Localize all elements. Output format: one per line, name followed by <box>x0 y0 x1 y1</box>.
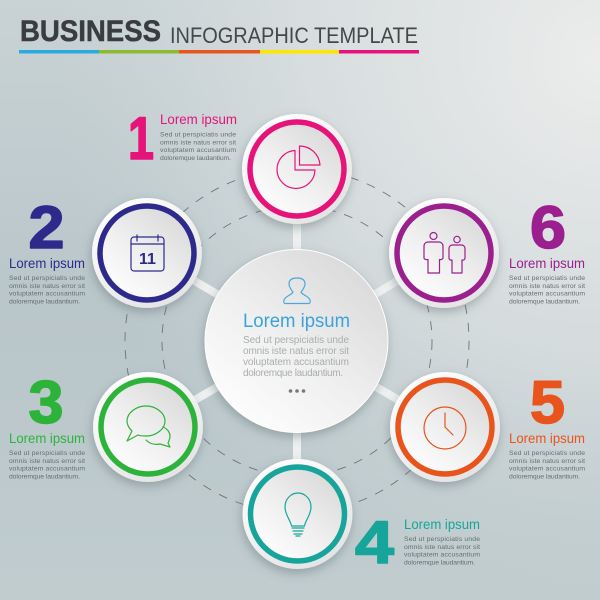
panel: node 1 pie chart <box>242 114 352 224</box>
body 3: voluptatem accusantium <box>9 466 85 472</box>
panel: node 5 clock <box>390 372 500 482</box>
heading 1: Lorem ipsum <box>160 112 237 127</box>
body 5: voluptatem accusantium <box>509 466 585 472</box>
number 5: 5 <box>530 369 565 436</box>
callout 3 <box>9 369 85 480</box>
body 1: voluptatem accusantium <box>160 147 236 154</box>
body 2: omnis iste natus error sit <box>9 283 85 290</box>
body 4: Sed ut perspiciatis unde <box>404 536 480 543</box>
callout 4 <box>355 509 480 576</box>
connector bars <box>147 169 445 514</box>
ellipsis dots <box>289 389 305 393</box>
body 2 <box>9 275 85 306</box>
dashed orbit rings <box>125 169 469 513</box>
body 5: doloremque laudantium. <box>509 474 580 480</box>
panel: central disc <box>205 250 388 432</box>
body 6: voluptatem accusantium <box>509 290 585 298</box>
panel: node 2 calendar <box>92 198 202 308</box>
rainbow title rule <box>19 50 419 54</box>
body 6: omnis iste natus error sit <box>509 283 585 290</box>
body 1: doloremque laudantium. <box>160 155 231 162</box>
icon: person <box>284 278 310 304</box>
body 2: voluptatem accusantium <box>9 290 85 298</box>
heading 6: Lorem ipsum <box>509 256 585 271</box>
body 6: doloremque laudantium. <box>509 298 580 306</box>
body 3 <box>9 450 85 480</box>
body 1 <box>160 132 236 162</box>
body 5 <box>509 450 585 480</box>
title: BUSINESS <box>20 15 161 48</box>
body 3: Sed ut perspiciatis unde <box>9 450 85 457</box>
panel: node 3 chat <box>93 372 203 482</box>
number 1: 1 <box>128 105 154 172</box>
body 1: Sed ut perspiciatis unde <box>160 132 236 138</box>
body 4 <box>404 536 480 566</box>
body 2: Sed ut perspiciatis unde <box>9 275 85 282</box>
body 5: Sed ut perspiciatis unde <box>509 450 585 457</box>
panel: node 6 people <box>389 198 499 308</box>
icon: pie chart <box>277 146 320 188</box>
body 3: doloremque laudantium. <box>9 474 80 480</box>
number 2: 2 <box>28 194 64 261</box>
body 5: omnis iste natus error sit <box>509 458 585 465</box>
callout 5 <box>509 369 585 480</box>
title <box>20 15 418 48</box>
callout 6 <box>509 194 585 306</box>
icon: clock <box>424 407 466 449</box>
number 6: 6 <box>530 194 566 261</box>
center body text <box>243 335 349 379</box>
body 2: doloremque laudantium. <box>9 298 80 306</box>
heading 5: Lorem ipsum <box>509 431 585 446</box>
center body text: omnis iste natus error sit <box>243 346 349 357</box>
callout 2 <box>9 194 85 306</box>
body 4: voluptatem accusantium <box>404 552 480 558</box>
center body text: doloremque laudantium. <box>243 368 343 379</box>
body 3: omnis iste natus error sit <box>9 458 85 465</box>
body 4: omnis iste natus error sit <box>404 544 480 551</box>
icon: light bulb <box>285 493 311 536</box>
center heading: Lorem ipsum <box>243 311 350 332</box>
heading 2: Lorem ipsum <box>9 256 85 271</box>
body 1: omnis iste natus error sit <box>160 140 236 146</box>
heading 3: Lorem ipsum <box>9 431 85 446</box>
body 6 <box>509 275 585 306</box>
icon: calendar: 11 <box>139 251 156 268</box>
body 6: Sed ut perspiciatis unde <box>509 275 585 282</box>
number 4: 4 <box>355 509 395 576</box>
number 3: 3 <box>28 369 64 436</box>
icon: two people <box>424 232 465 273</box>
panel: node 4 light bulb <box>242 459 352 569</box>
icon: speech bubbles <box>127 406 170 447</box>
body 4: doloremque laudantium. <box>404 560 475 566</box>
heading 4: Lorem ipsum <box>404 517 480 532</box>
center body text: voluptatem accusantium <box>243 357 349 368</box>
title: INFOGRAPHIC TEMPLATE <box>170 23 418 48</box>
center body text: Sed ut perspiciatis unde <box>243 335 349 346</box>
callout 1 <box>128 105 237 172</box>
